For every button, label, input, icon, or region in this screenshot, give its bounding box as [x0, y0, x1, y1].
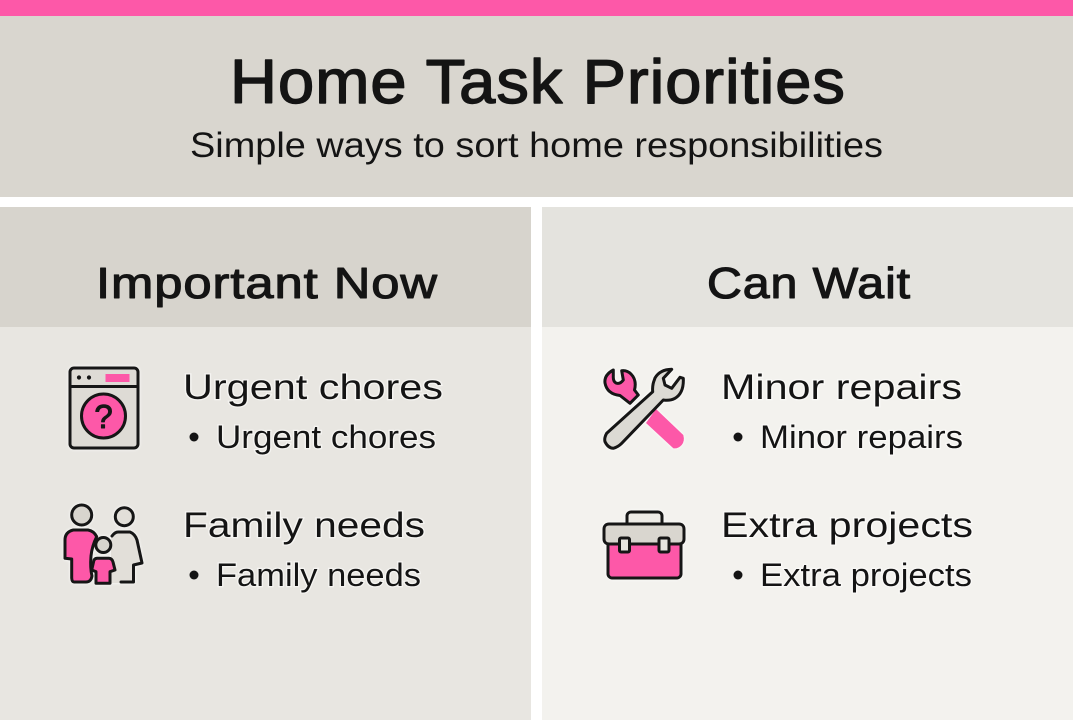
- task: Family needs: Family needs: [183, 506, 425, 545]
- column heading: Can Wait: [542, 207, 1073, 327]
- task: Minor repairs: Minor repairs: [721, 368, 962, 407]
- task: Minor repairs: [721, 368, 963, 455]
- header panel: [0, 16, 1073, 197]
- panel: Can Wait: [542, 207, 1073, 720]
- task: Extra projects: [721, 506, 973, 593]
- subtitle: Simple ways to sort home responsibilities: [190, 126, 883, 165]
- icon: toolbox: [604, 512, 684, 578]
- icon: family: [65, 505, 142, 583]
- task: Urgent chores: Urgent chores: [183, 368, 443, 407]
- task: Family needs: Family needs: [216, 557, 421, 593]
- task: Extra projects: Extra projects: [721, 506, 973, 545]
- icon: crossed tools: [605, 369, 684, 448]
- column heading: Important Now: [0, 207, 531, 327]
- icon: washing machine: [70, 368, 138, 448]
- top accent bar: [0, 0, 1073, 16]
- task: Urgent chores: [183, 368, 443, 455]
- panel: Important Now: [0, 207, 531, 720]
- task: Family needs: [183, 506, 425, 593]
- icon: washing machine: ?: [94, 398, 113, 435]
- title: Home Task Priorities: [230, 48, 846, 117]
- task: Urgent chores: Urgent chores: [216, 419, 436, 455]
- column heading: Can Wait: Can Wait: [707, 259, 911, 308]
- column heading: Important Now: Important Now: [96, 259, 438, 308]
- task: Extra projects: Extra projects: [760, 557, 972, 593]
- task: Minor repairs: Minor repairs: [760, 419, 963, 455]
